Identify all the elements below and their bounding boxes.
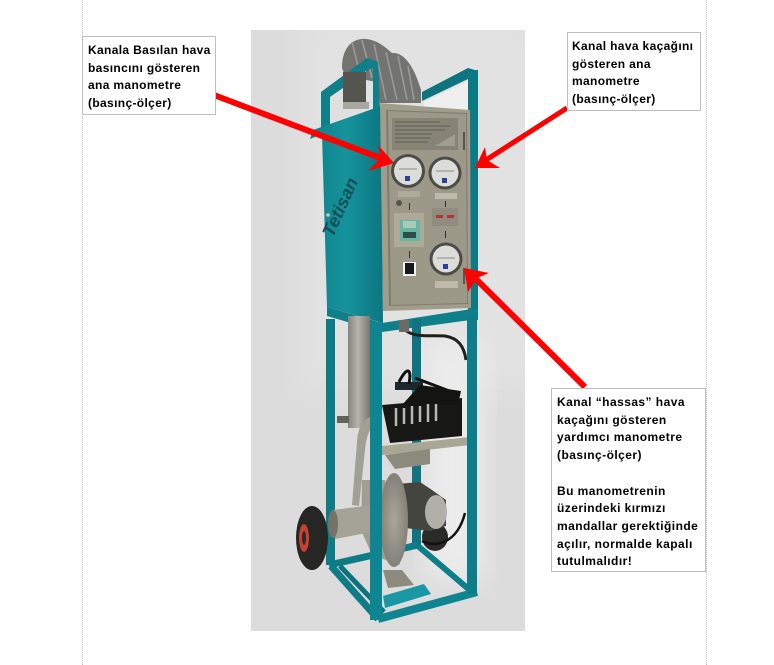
exhaust pipe (348, 316, 370, 428)
back top frame (422, 68, 478, 110)
callout: leakage gauge: Kanal hava kaçağını (572, 39, 693, 53)
callout: sensitive gauge: yardımcı manometre (557, 430, 682, 444)
callout: leakage gauge: gösteren ana (572, 57, 651, 71)
callout: pressure gauge: (basınç-ölçer) (88, 96, 172, 110)
bottom of cabinet (327, 307, 478, 332)
lower frame back posts (326, 319, 335, 565)
steel panel (380, 103, 471, 311)
gauge 3 (430, 242, 462, 276)
digital controller (394, 213, 424, 247)
left top frame (321, 58, 380, 128)
callout: pressure gauge (82, 36, 216, 115)
lower frame front posts (370, 322, 382, 620)
callout: sensitive gauge: açılır, normalde kapalı (557, 537, 693, 551)
product photo: Tetisan (318, 175, 362, 240)
callout: sensitive gauge: mandallar gerektiğinde (557, 519, 698, 533)
arrow: sensitive gauge (464, 268, 585, 387)
flexible hose (342, 39, 421, 103)
callout: pressure gauge: basıncını gösteren (88, 61, 200, 75)
gauge 2 (428, 156, 462, 190)
wheel (296, 506, 328, 570)
arrow: leakage gauge (475, 108, 567, 168)
callout: pressure gauge: Kanala Basılan hava (88, 43, 211, 57)
panel labels and switches (396, 191, 458, 288)
product photo (251, 20, 540, 631)
callout: leakage gauge: (basınç-ölçer) (572, 92, 656, 106)
cables (405, 330, 466, 360)
callout: sensitive gauge: üzerindeki kırmızı (557, 501, 666, 515)
rotary switch (403, 262, 416, 276)
lower frame base (329, 545, 477, 619)
callout: sensitive gauge: kaçağını gösteren (557, 413, 667, 427)
cabinet side (310, 106, 383, 323)
blower (328, 416, 465, 588)
black instrument case (382, 371, 462, 443)
callout: sensitive gauge: (basınç-ölçer) (557, 448, 642, 462)
arrow: pressure gauge (214, 95, 394, 171)
right frame post (468, 70, 478, 320)
callout: leakage gauge (567, 32, 701, 111)
gauge 1 (391, 154, 425, 188)
callout: sensitive gauge: Kanal “hassas” hava (557, 395, 685, 409)
callout: sensitive gauge (551, 388, 706, 572)
callout: pressure gauge: ana manometre (88, 78, 181, 92)
callout: sensitive gauge: Bu manometrenin (557, 484, 666, 498)
steel shelf (382, 437, 470, 469)
callout: sensitive gauge: tutulmalıdır! (557, 554, 632, 568)
callout: leakage gauge: manometre (572, 74, 640, 88)
